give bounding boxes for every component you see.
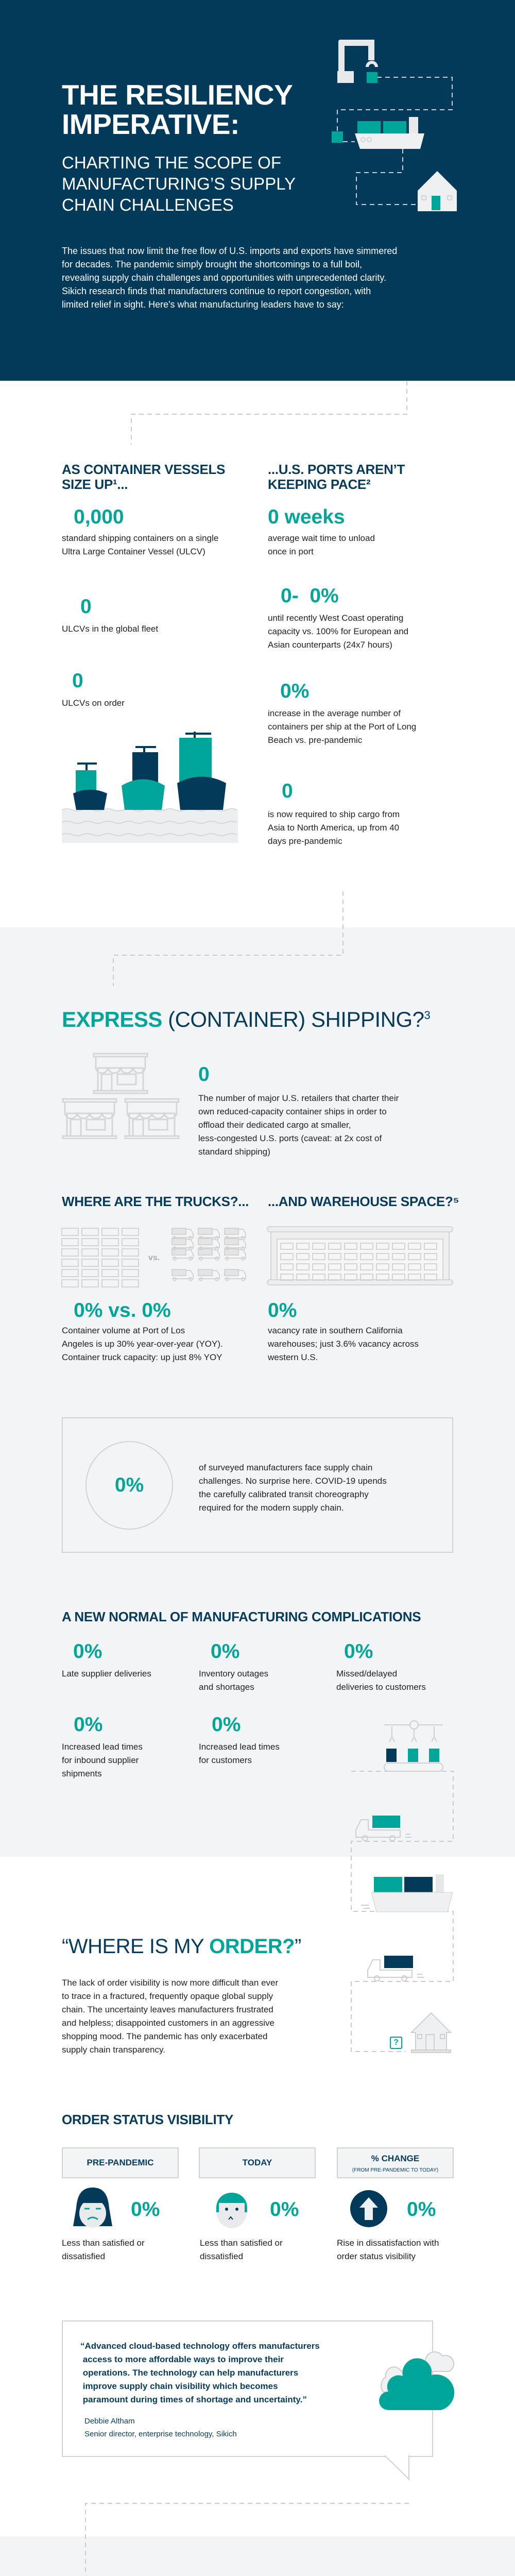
header box: today: TODAY	[243, 2158, 272, 2167]
stat: ULCV fleet: ULCVs in the global fleet	[62, 624, 158, 634]
stat: vacancy: western U.S.	[268, 1352, 318, 1362]
icon: factory line	[384, 1720, 443, 1772]
stat: operating capacity	[268, 585, 408, 650]
heading: where is my order: “WHERE IS MY ORDER?”	[62, 1935, 301, 1958]
icon: truck 2	[367, 1956, 424, 1981]
stats grid: complications: Increased lead times	[62, 1742, 143, 1752]
attribution: Senior director, enterprise technology, Sikich	[84, 2430, 237, 2438]
stat: containers per ship	[268, 680, 416, 745]
heading: container vessels	[62, 462, 225, 492]
subtitle: MANUFACTURING’S SUPPLY	[62, 174, 296, 193]
icon: robot arm	[337, 40, 378, 83]
text: order visibility: supply chain transparency.	[62, 2045, 165, 2055]
icon: stores	[62, 1053, 179, 1139]
text: Less than satisfied or	[200, 2238, 283, 2248]
intro text	[62, 246, 397, 310]
stat: containers: standard shipping containers on a single	[62, 533, 218, 543]
header box: % change	[337, 2147, 454, 2178]
header box: % change: (FROM PRE-PANDEMIC TO TODAY)	[352, 2167, 438, 2173]
heading: order status visibility: ORDER STATUS VISIBILITY	[62, 2112, 233, 2127]
stats grid: complications: 0%	[344, 1640, 373, 1663]
icon: man face	[216, 2193, 247, 2228]
hero background	[0, 0, 515, 381]
stat: retailers: The number of major U.S. retailers that charter their	[198, 1093, 399, 1103]
stats grid: complications: and shortages	[199, 1682, 254, 1692]
stat: vacancy	[268, 1299, 419, 1362]
stat: containers per ship: 0%	[280, 680, 309, 702]
stat: change: 0%	[407, 2198, 436, 2221]
quote text: operations. The technology can help manufacturers	[83, 2368, 298, 2378]
stat: containers: Ultra Large Container Vessel (ULCV)	[62, 547, 205, 556]
stat: operating capacity: Asian counterparts (24x7 hours)	[268, 640, 392, 650]
stat: container volume vs truck capacity: Container truck capacity: up just 8% YOY	[62, 1352, 222, 1362]
stat: ULCV fleet: 0	[80, 596, 92, 618]
heading: warehouse: ...AND WAREHOUSE SPACE?⁵	[268, 1194, 459, 1209]
intro text: limited relief in sight. Here's what manufacturing leaders have to say:	[62, 299, 344, 310]
icon: cargo ship	[355, 117, 424, 149]
quote text	[80, 2341, 320, 2404]
stat: retailers: own reduced-capacity container ships in order to	[198, 1107, 387, 1116]
stat: container volume vs truck capacity: 0% vs. 0%	[74, 1299, 171, 1321]
stat: vacancy: warehouses; just 3.6% vacancy across	[268, 1339, 419, 1349]
subtitle: CHARTING THE SCOPE OF	[62, 153, 281, 172]
stat: shipping time: Asia to North America, up from 40	[268, 823, 399, 833]
text: order visibility: and helpless; disappointed customers in an aggressive	[62, 2018, 274, 2028]
heading: ports: KEEPING PACE²	[268, 477, 370, 492]
header box: pre-pandemic	[62, 2147, 179, 2178]
stats grid: complications: 0%	[74, 1714, 102, 1736]
stats grid: complications: for inbound supplier	[62, 1755, 139, 1765]
intro text: Sikich research finds that manufacturers continue to report congestion, with	[62, 286, 371, 296]
stats grid: complications: Inventory outages	[199, 1669, 268, 1679]
heading: express shipping: EXPRESS (CONTAINER) SHIPPING?3	[62, 1007, 430, 1031]
stat: operating capacity: until recently West Coast operating	[268, 613, 403, 623]
attribution	[84, 2417, 237, 2438]
text: order visibility: to trace in a fractured, frequently opaque global supply	[62, 1991, 273, 2001]
stat: shipping time: 0	[282, 780, 293, 802]
stat: pre-pandemic: 0%	[131, 2198, 160, 2221]
stat: vacancy: vacancy rate in southern California	[268, 1326, 403, 1335]
icon: teal crate	[332, 131, 343, 143]
icon: containers vs trucks	[61, 1228, 246, 1287]
stats grid: complications: 0%	[211, 1640, 239, 1663]
stat: containers per ship: containers per ship at the Port of Long	[268, 722, 416, 732]
text: order visibility: The lack of order visibility is now more difficult than ever	[62, 1978, 278, 1988]
stat: container volume vs truck capacity: Angeles is up 30% year-over-year (YOY).	[62, 1339, 223, 1349]
stats grid: complications: 0%	[212, 1714, 241, 1736]
callout: quote	[62, 2320, 433, 2457]
header box: today	[199, 2147, 316, 2178]
stat: container volume vs truck capacity: Container volume at Port of Los	[62, 1326, 185, 1335]
stat: shipping time	[268, 780, 400, 846]
callout tail	[384, 2455, 409, 2480]
stats grid: complications: for customers	[199, 1755, 252, 1765]
stats grid: complications: shipments	[62, 1769, 101, 1778]
text: the carefully calibrated transit choreography	[199, 1489, 369, 1499]
stat: ULCV fleet	[62, 596, 158, 634]
text: required for the modern supply chain.	[199, 1503, 344, 1513]
stat: today: 0%	[270, 2198, 299, 2221]
text: Rise in dissatisfaction with	[337, 2238, 439, 2248]
stat: containers: 0,000	[74, 506, 124, 528]
text: of surveyed manufacturers face supply chain	[199, 1463, 372, 1472]
captions: Less than satisfied or	[62, 2238, 145, 2248]
icon: question box: ?	[393, 2038, 399, 2047]
subtitle	[62, 153, 296, 214]
circle stat	[85, 1441, 173, 1530]
stat: ULCVs on order: ULCVs on order	[62, 698, 125, 708]
heading: new normal: A NEW NORMAL OF MANUFACTURING COMPLICATIONS	[62, 1609, 421, 1624]
stat: vacancy: 0%	[268, 1299, 297, 1321]
text: challenges. No surprise here. COVID-19 upends	[199, 1476, 387, 1486]
heading: trucks: WHERE ARE THE TRUCKS?...	[62, 1194, 249, 1209]
text: order visibility: chain. The uncertainty leaves manufacturers frustrated	[62, 2005, 273, 2014]
stat: ULCVs on order: 0	[72, 670, 83, 692]
title	[62, 79, 293, 140]
quote text: access to more affordable ways to improve their	[83, 2354, 284, 2364]
icon: ship 2	[361, 1874, 453, 1912]
stats grid: complications: Missed/delayed	[336, 1669, 397, 1679]
heading: ports	[268, 462, 405, 492]
stat: container volume vs truck capacity	[62, 1299, 223, 1362]
icon: house 2	[410, 2012, 452, 2053]
stats grid: complications: 0%	[73, 1640, 102, 1663]
stat: operating capacity: 0- 0%	[281, 585, 339, 607]
attribution: Debbie Altham	[84, 2417, 135, 2426]
stats grid: complications: deliveries to customers	[336, 1682, 426, 1692]
stat: shipping time: days pre-pandemic	[268, 836, 342, 846]
icon: house	[418, 171, 457, 211]
stat: containers per ship: increase in the average number of	[268, 708, 401, 718]
subtitle: CHAIN CHALLENGES	[62, 195, 234, 214]
illustration: ships on water	[62, 732, 238, 843]
quote text: improve supply chain visibility which becomes	[83, 2381, 278, 2391]
stats grid: complications	[62, 1640, 426, 1778]
icon: up arrow circle	[350, 2190, 387, 2227]
captions: dissatisfied	[62, 2251, 105, 2261]
stats grid: complications: Late supplier deliveries	[62, 1669, 151, 1679]
icon: containers vs trucks: vs.	[148, 1253, 160, 1262]
stat: retailers	[198, 1063, 399, 1157]
stat: ULCVs on order	[62, 670, 125, 708]
text: dissatisfied	[200, 2251, 243, 2261]
stat: retailers: 0	[198, 1063, 210, 1086]
heading: container vessels: AS CONTAINER VESSELS	[62, 462, 225, 477]
stats grid: complications: Increased lead times	[199, 1742, 280, 1752]
stat: containers per ship: Beach vs. pre-pandemic	[268, 735, 362, 745]
stat: wait weeks: average wait time to unload	[268, 533, 375, 543]
icon: woman face	[73, 2188, 112, 2228]
quote text: paramount during times of shortage and uncertainty.”	[83, 2395, 307, 2404]
title: IMPERATIVE:	[62, 108, 239, 140]
captions	[62, 2238, 145, 2261]
icon: clouds	[379, 2351, 454, 2410]
circle stat: 0%	[115, 1474, 144, 1496]
stat: wait weeks: 0 weeks	[268, 506, 345, 528]
text: order status visibility	[337, 2251, 416, 2261]
stat: containers	[62, 506, 218, 556]
stat: retailers: offload their dedicated cargo at smaller,	[198, 1120, 351, 1130]
intro text: The issues that now limit the free flow of U.S. imports and exports have simmered	[62, 246, 397, 256]
gray band 2	[0, 2536, 515, 2576]
stat: wait weeks	[268, 506, 375, 556]
icon: warehouse	[267, 1226, 453, 1285]
panel: surveyed manufacturers	[62, 1417, 453, 1553]
text: order visibility: shopping mood. The pandemic has only exacerbated	[62, 2031, 267, 2041]
stat: shipping time: is now required to ship cargo from	[268, 809, 400, 819]
stat: retailers: standard shipping)	[198, 1147, 270, 1157]
icon: delivery truck 1	[355, 1816, 411, 1841]
intro text: revealing supply chain challenges and opportunities with unprecedented clarity.	[62, 273, 386, 283]
icon: question box	[390, 2037, 402, 2049]
stat: operating capacity: capacity vs. 100% for European and	[268, 626, 408, 636]
header box: % change: % CHANGE	[371, 2154, 419, 2163]
text: order visibility	[62, 1978, 278, 2055]
title: THE RESILIENCY	[62, 79, 293, 111]
heading: container vessels: SIZE UP¹...	[62, 477, 128, 492]
intro text: for decades. The pandemic simply brought the shortcomings to a full boil,	[62, 259, 362, 269]
header box: pre-pandemic: PRE-PANDEMIC	[87, 2158, 154, 2167]
heading: ports: ...U.S. PORTS AREN’T	[268, 462, 405, 477]
stat: wait weeks: once in port	[268, 547, 314, 556]
stat: retailers: less-congested U.S. ports (caveat: at 2x cost of	[198, 1133, 382, 1143]
quote text: “Advanced cloud-based technology offers manufacturers	[80, 2341, 320, 2351]
gray band 1	[0, 927, 515, 1857]
text	[199, 1463, 387, 1513]
